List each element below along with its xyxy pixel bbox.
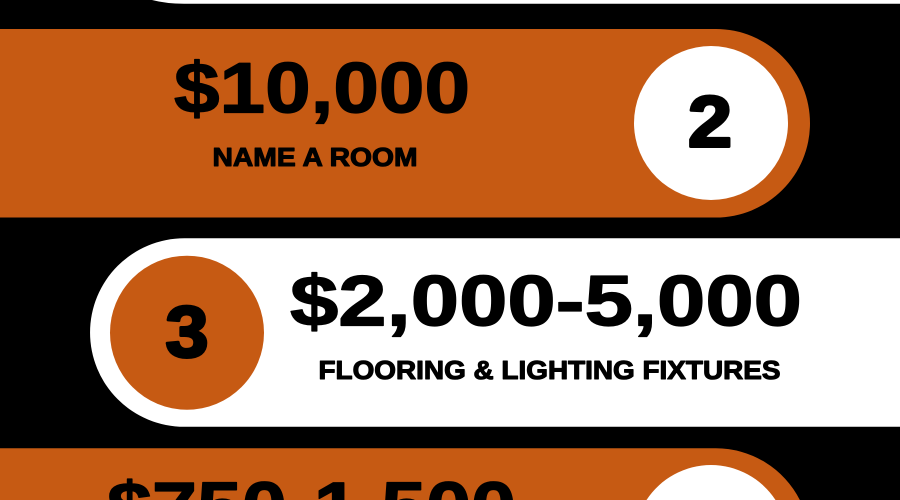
- number badge 2: [634, 46, 788, 200]
- panel: tier 3: [90, 238, 900, 427]
- number badge 3: 3: [166, 292, 208, 372]
- panel: tier 4: [0, 448, 800, 500]
- number badge 3: [110, 256, 264, 410]
- number badge 4: [646, 465, 776, 500]
- label: name a room: NAME A ROOM: [212, 142, 418, 172]
- panel: tier 1 white bar: [152, 0, 900, 4]
- label: flooring and lighting fixtures: FLOORING & LIGHTING FIXTURES: [318, 355, 780, 385]
- panel: tier 2: [0, 29, 810, 218]
- amount: $10,000: $10,000: [174, 50, 470, 128]
- amount: $2,000-5,000: $2,000-5,000: [290, 262, 802, 342]
- number badge 2: 2: [688, 82, 732, 162]
